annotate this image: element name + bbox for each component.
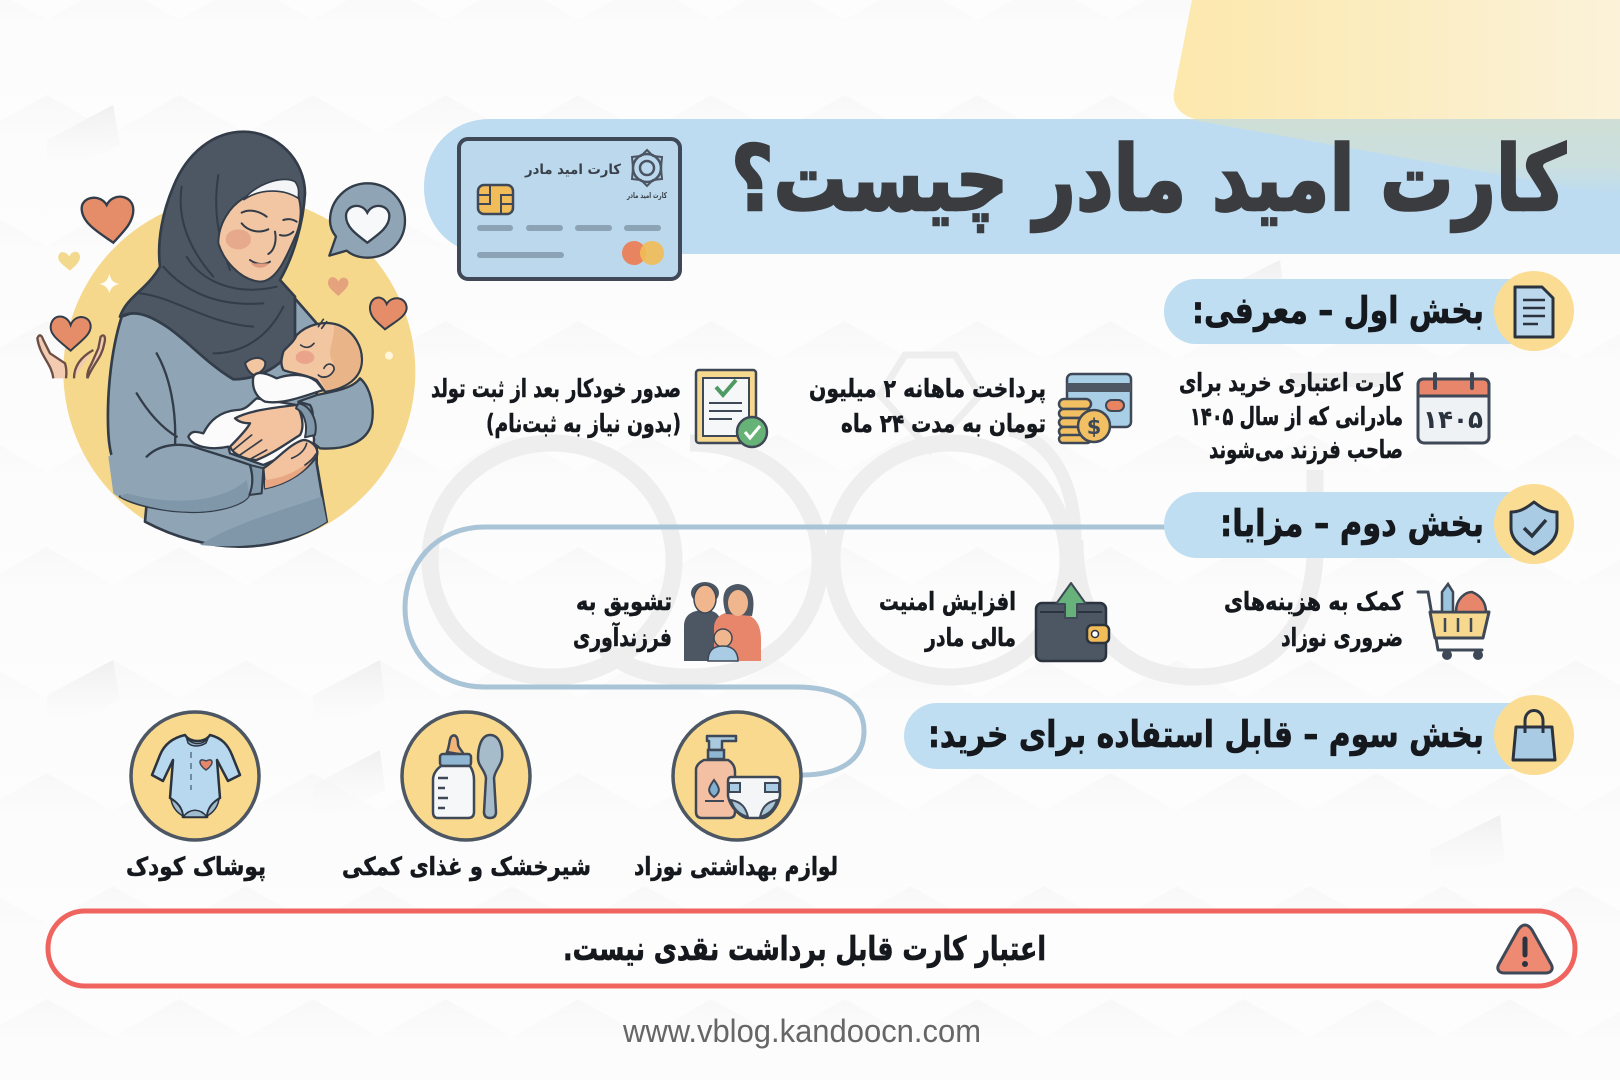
white underscarf (243, 179, 299, 200)
text: item 2 (809, 374, 1046, 439)
icon: credit card: کارت امید مادر (524, 162, 622, 178)
text: item 2: افزایش امنیت (879, 587, 1016, 617)
heading text: بخش سوم – قابل استفاده برای خرید: (928, 713, 1484, 757)
text: item 3: صدور خودکار بعد از ثبت تولد (431, 374, 681, 404)
heart top left (82, 197, 133, 243)
speech bubble with heart (329, 183, 405, 258)
icon: warning triangle (1498, 925, 1552, 973)
icon: calendar 1405 (1418, 374, 1489, 443)
text: item 1 (1224, 587, 1403, 653)
connector line between sections (405, 527, 1164, 775)
text: item 3: فرزندآوری (573, 622, 672, 653)
icon: credit card: کارت امید مادر (626, 191, 667, 200)
icon: card and coins (1059, 374, 1131, 443)
text: item 1: ضروری نوزاد (1281, 623, 1403, 653)
text: item 3: (بدون نیاز به ثبت‌نام) (486, 409, 681, 439)
cuff right (296, 403, 316, 437)
dress shading (137, 353, 327, 546)
icon: shield (1511, 502, 1557, 554)
panel: section 3 heading (904, 695, 1574, 775)
caring hands with heart (37, 316, 105, 378)
icon: credit card (459, 139, 680, 279)
text: item 2: پرداخت ماهانه ۲ میلیون (809, 374, 1046, 404)
icon: shopping cart (1418, 584, 1489, 660)
item: formula and food (342, 712, 591, 882)
icon: document (1515, 287, 1553, 337)
heading text: بخش اول – معرفی: (1192, 289, 1484, 332)
small heart right (328, 277, 348, 296)
icon: calendar 1405: ۱۴۰۵ (1423, 405, 1483, 434)
panel: section 1 items (431, 368, 1489, 465)
baby head (281, 319, 362, 392)
text: item 2: تومان به مدت ۲۴ ماه (841, 409, 1046, 439)
text: item 1: مادرانی که از سال ۱۴۰۵ (1190, 402, 1403, 431)
illustration: mother holding baby (37, 132, 415, 548)
mother's lower hand (263, 440, 317, 488)
heading text: بخش دوم – مزایا: (1220, 502, 1484, 546)
baby hand (245, 358, 265, 375)
panel: section 2 items (573, 582, 1489, 661)
text: item 1: صاحب فرزند می‌شوند (1209, 435, 1403, 465)
label: شیرخشک و غذای کمکی (342, 852, 591, 882)
yellow background circle (63, 196, 415, 548)
warning text: اعتبار کارت قابل برداشت نقدی نیست. (563, 929, 1046, 969)
baby sleeve (253, 373, 323, 402)
face details (226, 211, 297, 268)
hijab (120, 132, 305, 379)
lower cuff (249, 465, 263, 495)
hijab folds (140, 175, 283, 353)
panel: purchasable items (126, 712, 838, 882)
icon: certificate with check (696, 370, 767, 447)
text: item 1: کمک به هزینه‌های (1224, 587, 1403, 617)
panel: section 1 heading (1164, 271, 1574, 351)
text: item 1: کارت اعتباری خرید برای (1179, 368, 1403, 398)
icon: family (684, 582, 761, 661)
mother's dress (108, 297, 327, 547)
heart right (370, 298, 407, 329)
item: hygiene products (634, 712, 838, 882)
mother's far sleeve (298, 378, 373, 449)
dot (385, 352, 393, 360)
text: item 3 (573, 587, 672, 653)
item: baby clothing (126, 712, 266, 882)
face (218, 190, 301, 282)
text: item 1 (1179, 368, 1403, 465)
icon: card and coins: $ (1087, 415, 1101, 439)
icon: shopping bag (1513, 710, 1555, 760)
callout: cash withdrawal warning (48, 911, 1575, 986)
baby wrap (188, 398, 314, 465)
text: item 2: مالی مادر (923, 623, 1016, 652)
small yellow heart (58, 252, 80, 271)
icon: wallet with up arrow (1036, 583, 1109, 661)
text: item 2 (879, 587, 1016, 652)
yellow corner shape (1174, 0, 1620, 119)
mother's upper hand (230, 405, 302, 460)
label: لوازم بهداشتی نوزاد (634, 852, 838, 882)
website url: www.vblog.kandoocn.com (622, 1013, 981, 1049)
panel: section 2 heading (1164, 484, 1574, 564)
title banner (424, 119, 1620, 254)
mother's near sleeve (108, 444, 252, 512)
text: item 3: تشویق به (576, 587, 672, 617)
baby and arms (108, 319, 373, 512)
label: پوشاک کودک (126, 852, 266, 882)
text: item 3 (431, 374, 681, 439)
sparkle (99, 273, 119, 293)
